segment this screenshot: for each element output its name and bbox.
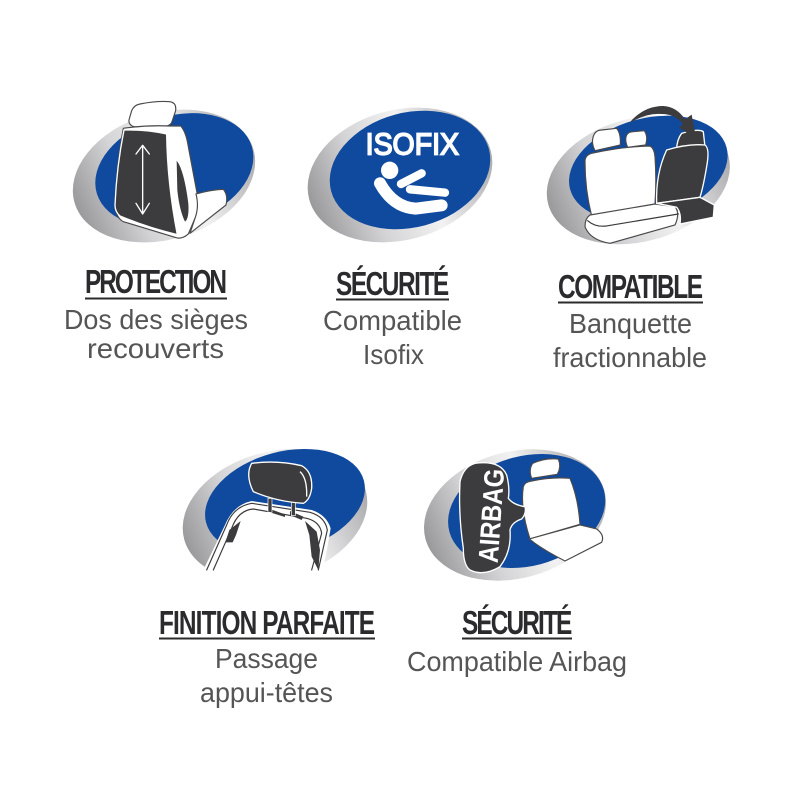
text: finition description: appui-têtes	[200, 677, 333, 708]
text: compatible description: fractionnable	[553, 342, 707, 373]
icon: split bench seat	[532, 96, 744, 264]
icon: isofix	[292, 88, 508, 262]
icon: airbag seat: AIRBAG	[473, 468, 510, 564]
icon: isofix: ISOFIX	[366, 128, 459, 162]
text: finition description: Passage	[215, 643, 318, 674]
heading: protection: PROTECTION	[85, 265, 227, 301]
panel: protection	[56, 88, 272, 364]
text: isofix description: Isofix	[363, 339, 424, 370]
arrow: flip seat	[629, 106, 696, 139]
text: protection description	[64, 304, 248, 364]
icon: headrest passage	[168, 429, 382, 600]
text: compatible description: Banquette	[569, 308, 692, 339]
text: protection description: recouverts	[87, 333, 224, 364]
panel: sécurité airbag	[407, 430, 627, 677]
panel: finition parfaite	[159, 429, 382, 708]
heading: compatible: COMPATIBLE	[558, 270, 703, 306]
icon: seat back protection	[56, 88, 272, 264]
text: isofix description: Compatible	[323, 305, 462, 336]
text: protection description: Dos des sièges	[64, 304, 248, 335]
panel: sécurité isofix	[292, 88, 508, 370]
text: isofix description	[323, 305, 462, 370]
text: compatible description	[553, 308, 707, 373]
heading: finition parfaite: FINITION PARFAITE	[159, 606, 375, 642]
icon: airbag seat	[409, 430, 621, 600]
heading: sécurité: SÉCURITÉ	[336, 264, 449, 303]
text: airbag description: Compatible Airbag	[407, 646, 627, 677]
text: finition description	[200, 643, 333, 708]
heading: sécurité airbag: SÉCURITÉ	[462, 603, 572, 642]
panel: compatible	[532, 96, 744, 373]
